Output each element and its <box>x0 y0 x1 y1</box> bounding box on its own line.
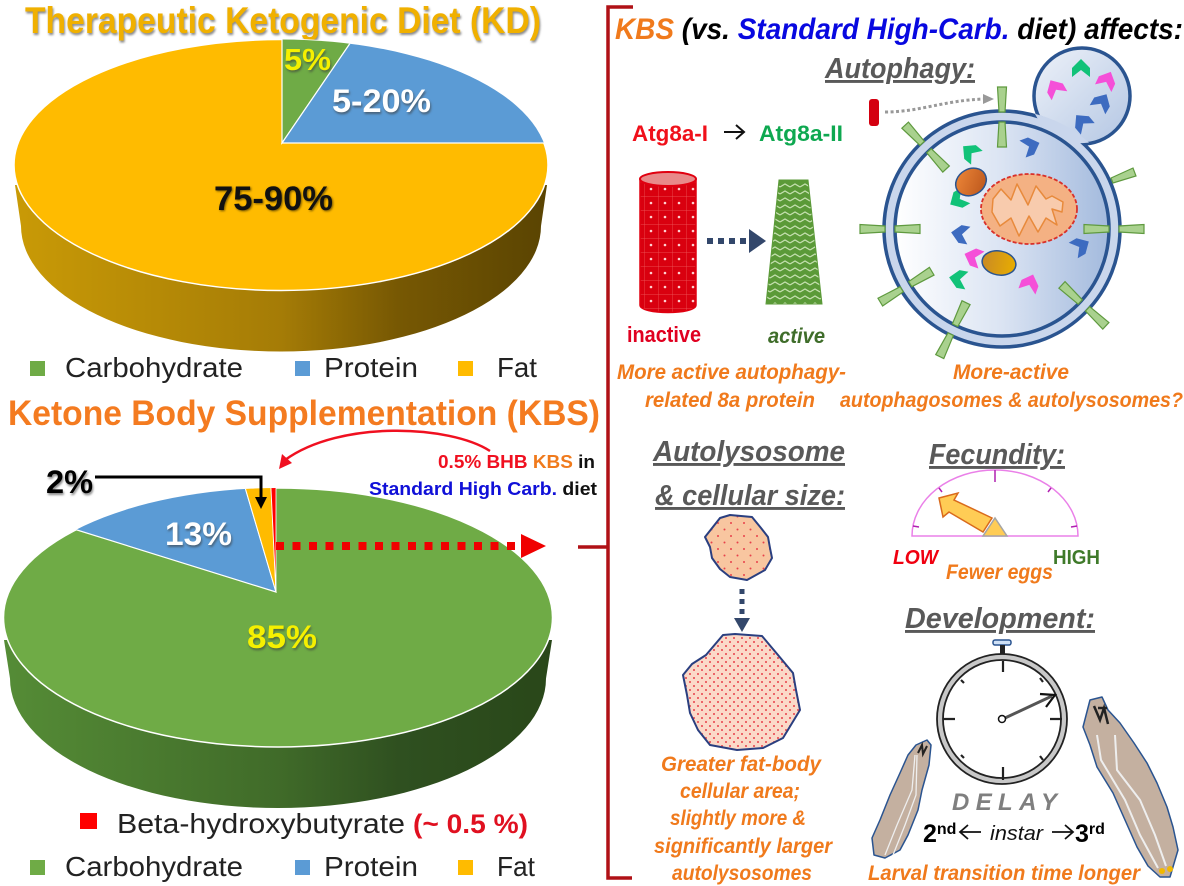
mitochondrion <box>981 174 1077 244</box>
text: instar transition: 2 <box>923 820 937 848</box>
label: inactive: inactive <box>627 322 701 347</box>
legend: KBS pie: Fat <box>497 851 535 882</box>
legend: KD pie: Fat <box>497 352 537 383</box>
text: Atg8a conversion <box>632 121 843 146</box>
text: Atg8a conversion: Atg8a-II <box>759 121 843 146</box>
text: instar transition: nd <box>937 821 956 838</box>
callout: 2% fat <box>46 464 267 509</box>
arrow: grey dotted <box>885 94 994 112</box>
chart: KD 3D pie <box>14 39 548 352</box>
icon: inactive cylinder <box>640 172 696 312</box>
label: 85%: 85% <box>247 619 317 655</box>
text: BHB note: 0.5% BHB KBS in <box>438 451 595 472</box>
icon: large cell <box>683 634 800 750</box>
text: instar transition: rd <box>1089 821 1105 838</box>
arrow: inactive to active <box>707 229 766 253</box>
label: 5%: 5% <box>284 42 331 77</box>
label: HIGH: HIGH <box>1053 547 1100 569</box>
text: instar transition <box>923 820 1105 848</box>
needle <box>939 493 992 532</box>
receptor: red inactive protein <box>869 99 879 126</box>
label: DELAY: DELAY <box>952 789 1059 816</box>
callout: 2% fat: 2% <box>46 464 93 500</box>
label: 5-20%: 5-20% <box>332 83 431 119</box>
text: Atg8a caption: More active autophagy- <box>617 361 846 384</box>
text: instar transition: 3 <box>1075 820 1089 848</box>
legend: KBS pie: (~ 0.5 %) <box>413 809 528 839</box>
text: fat-body caption: slightly more & <box>670 807 806 830</box>
icon: 3rd instar larva <box>1083 697 1178 877</box>
icon: active trapezoid <box>766 180 822 304</box>
legend: KD pie: Carbohydrate <box>65 352 243 383</box>
legend: KBS pie: Carbohydrate <box>65 851 243 882</box>
legend: KBS pie <box>30 808 535 882</box>
icon: 2nd instar larva <box>872 740 931 858</box>
arrow: curved red to BHB slice <box>279 431 490 469</box>
heading: Autolysosome and cellular size: Autolysosome <box>652 436 845 468</box>
cell body with bud <box>884 48 1130 347</box>
chart: fecundity gauge <box>912 470 1078 536</box>
text: standard diet note: Standard High Carb. diet <box>369 478 597 499</box>
heading: Autophagy: Autophagy: <box>824 53 975 85</box>
text: fat-body caption <box>654 753 834 885</box>
text: Atg8a conversion: Atg8a-I <box>632 121 708 146</box>
legend: KBS pie: Beta-hydroxybutyrate <box>117 808 405 839</box>
label: LOW: LOW <box>893 547 940 569</box>
text: Atg8a caption: related 8a protein <box>645 389 815 412</box>
text: autophagosome caption <box>840 361 1183 412</box>
text: fat-body caption: significantly larger <box>654 835 834 858</box>
legend: KBS pie: Protein <box>324 851 418 882</box>
text: fat-body caption: autolysosomes <box>672 862 812 885</box>
text: autophagosome caption: More-active <box>953 361 1069 384</box>
text: larval caption: Larval transition time longer <box>868 862 1142 885</box>
text: fat-body caption: cellular area; <box>680 780 800 803</box>
organelle: orange <box>951 163 991 201</box>
label: 13%: 13% <box>165 516 232 552</box>
icon: small cell <box>705 515 772 580</box>
legend: KD pie <box>30 352 537 383</box>
cargo chevrons <box>946 59 1119 295</box>
text: instar transition: instar <box>990 823 1044 845</box>
organelle: gold <box>980 248 1018 278</box>
text: fat-body caption: Greater fat-body <box>661 753 822 776</box>
text: Atg8a caption <box>617 361 846 412</box>
label: active: active <box>768 325 825 348</box>
title: Therapeutic Ketogenic Diet: Therapeutic Ketogenic Diet (KD) <box>25 0 541 41</box>
bracket <box>578 7 633 878</box>
icon: stopwatch <box>937 640 1067 784</box>
arrow: dotted red to panel <box>276 534 546 558</box>
heading: Autolysosome and cellular size <box>652 436 845 512</box>
heading: Development: Development: <box>905 603 1095 635</box>
legend: KD pie: Protein <box>324 352 418 383</box>
arrow: small to large cell <box>734 589 750 632</box>
chart: KBS 3D pie <box>4 467 552 808</box>
heading: Fecundity: Fecundity: <box>929 439 1065 471</box>
text: Fewer eggs: Fewer eggs <box>946 561 1053 584</box>
title: Ketone Body Supplementation: Ketone Body Supplementation (KBS) <box>8 394 600 433</box>
receptors on membrane <box>860 87 1144 359</box>
icon: autophagy cell <box>860 48 1144 359</box>
heading: KBS effects: KBS (vs. Standard High-Carb. diet) affects: <box>615 13 1183 46</box>
label: 75-90%: 75-90% <box>214 180 333 218</box>
heading: Autolysosome and cellular size: & cellular size: <box>655 480 845 512</box>
